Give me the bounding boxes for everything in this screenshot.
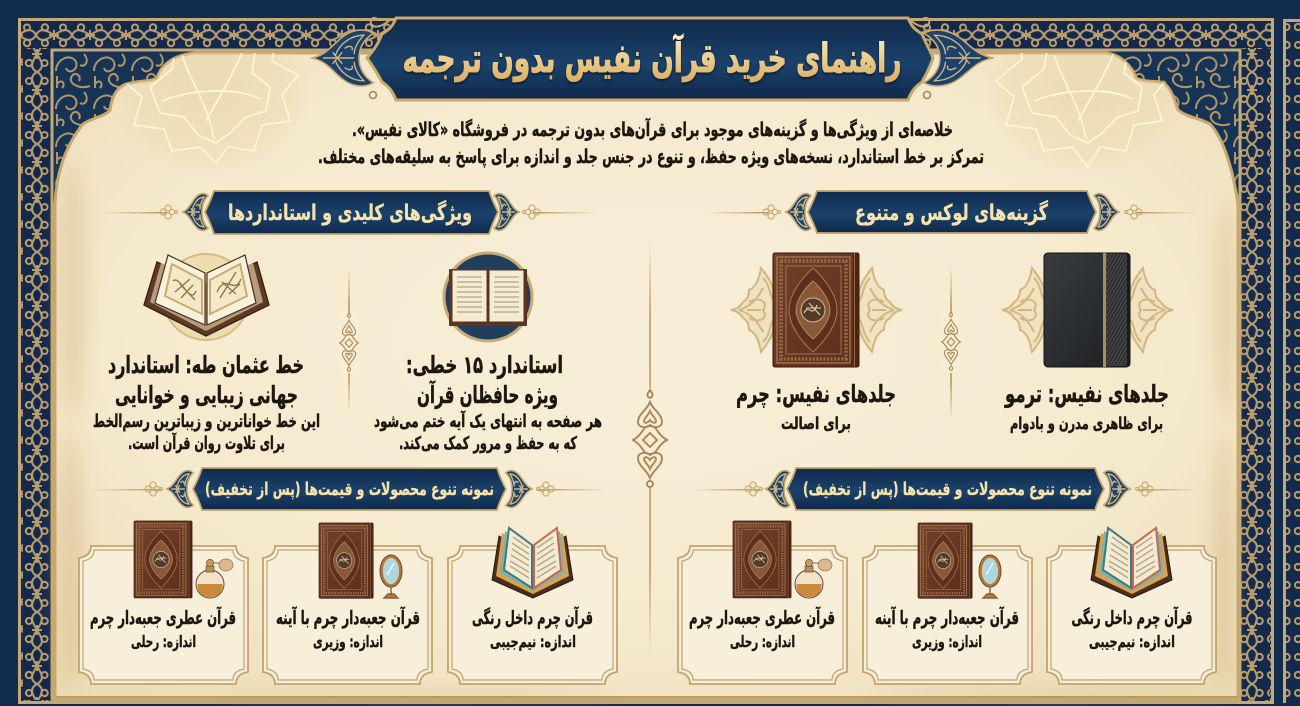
section heading: luxury options bbox=[704, 191, 1198, 233]
product card: boxed with mirror, right group bbox=[863, 523, 1032, 684]
icon: black thermo cover with ornament bbox=[1002, 253, 1173, 367]
section heading: key features bbox=[102, 191, 597, 234]
glowing corner medallion right bbox=[996, 53, 1174, 168]
text block: 15-line standard: استاندارد ۱۵ خطی: bbox=[406, 351, 563, 379]
text block: 15-line standard: ویژه حافظان قرآن bbox=[417, 380, 558, 409]
product card: boxed with mirror, right group: اندازه: وزیری bbox=[912, 633, 982, 651]
intro text: تمرکز بر خط استاندارد، نسخه‌های ویژه حفظ، و تنوع در جنس جلد و اندازه برای پاسخ به سلیقه‌های مختلف. bbox=[318, 146, 984, 168]
section heading: luxury options: گزینه‌های لوکس و متنوع bbox=[855, 199, 1048, 226]
text block: Uthman Taha script: این خط خواناترین و زیباترین رسم‌الخط bbox=[93, 412, 320, 432]
text block: leather covers bbox=[736, 380, 896, 434]
product card: perfumed Quran, left group bbox=[79, 521, 248, 684]
product card: boxed with mirror, left group bbox=[263, 523, 432, 684]
text block: Uthman Taha script bbox=[93, 351, 320, 454]
product card: boxed with mirror, left group: قرآن جعبه‌دار چرم با آینه bbox=[276, 606, 420, 629]
text block: 15-line standard bbox=[374, 351, 602, 454]
product card: boxed with mirror, left group: اندازه: وزیری bbox=[313, 633, 383, 651]
text block: 15-line standard: که به حفظ و مرور کمک می‌کند. bbox=[399, 434, 578, 454]
icon: open Quran on gold circle bbox=[144, 254, 269, 340]
product card: coloured interior, right group: قرآن چرم داخل رنگی bbox=[1072, 606, 1192, 629]
text block: thermo covers: جلدهای نفیس: ترمو bbox=[1004, 380, 1169, 408]
product card: coloured interior, left group bbox=[448, 528, 617, 684]
text block: 15-line standard: هر صفحه به انتهای یک آیه ختم می‌شود bbox=[374, 409, 602, 432]
glowing corner medallion left bbox=[122, 53, 299, 164]
sample heading right: نمونه تنوع محصولات و قیمت‌ها (پس از تخفیف) bbox=[803, 480, 1092, 500]
product card: perfumed Quran, right group bbox=[678, 521, 847, 684]
icon: 15-line mushaf on navy circle bbox=[444, 253, 532, 341]
intro text bbox=[318, 117, 984, 168]
product card: perfumed Quran, right group: اندازه: رحلی bbox=[730, 633, 795, 651]
product card: coloured interior, right group: اندازه: نیم‌جیبی bbox=[1089, 633, 1175, 651]
product card: perfumed Quran, left group: قرآن عطری جعبه‌دار چرم bbox=[90, 606, 236, 629]
title text: راهنمای خرید قرآن نفیس بدون ترجمه bbox=[402, 33, 902, 82]
section heading: key features: ویژگی‌های کلیدی و استانداردها bbox=[228, 199, 472, 226]
parchment age stains bbox=[55, 160, 1238, 702]
product card: coloured interior, left group: قرآن چرم داخل رنگی bbox=[472, 606, 593, 629]
product card: perfumed Quran, left group: اندازه: رحلی bbox=[131, 633, 196, 651]
sample heading left: نمونه تنوع محصولات و قیمت‌ها (پس از تخفیف) bbox=[205, 480, 494, 500]
product card: coloured interior, right group bbox=[1047, 528, 1216, 684]
text block: leather covers: جلدهای نفیس: چرم bbox=[736, 380, 896, 408]
text block: Uthman Taha script: جهانی زیبایی و خوانایی bbox=[115, 381, 298, 409]
product card: coloured interior, left group: اندازه: نیم‌جیبی bbox=[490, 633, 576, 651]
neighbouring frame strip at right edge bbox=[1283, 19, 1300, 703]
sample heading left bbox=[89, 468, 610, 510]
cover divider bbox=[942, 267, 960, 420]
sample heading right bbox=[691, 468, 1202, 510]
text block: Uthman Taha script: خط عثمان طه: استاندارد bbox=[108, 351, 304, 379]
product card: perfumed Quran, right group: قرآن عطری جعبه‌دار چرم bbox=[689, 606, 835, 629]
intro text: خلاصه‌ای از ویژگی‌ها و گزینه‌های موجود برای قرآن‌های بدون ترجمه در فروشگاه «کالای نفیس». bbox=[352, 117, 953, 141]
title banner bbox=[311, 18, 994, 100]
text block: thermo covers: برای ظاهری مدرن و بادوام bbox=[1010, 414, 1163, 434]
icon: leather cover with ornament bbox=[731, 253, 902, 367]
feature divider bbox=[340, 267, 358, 413]
text block: leather covers: برای اصالت bbox=[781, 414, 851, 434]
text block: thermo covers bbox=[1004, 380, 1169, 434]
central vertical divider bbox=[633, 242, 667, 654]
bottom inner gold rule bbox=[56, 696, 1238, 698]
text block: Uthman Taha script: برای تلاوت روان قرآن است. bbox=[128, 431, 285, 454]
product card: boxed with mirror, right group: قرآن جعبه‌دار چرم با آینه bbox=[875, 606, 1019, 629]
